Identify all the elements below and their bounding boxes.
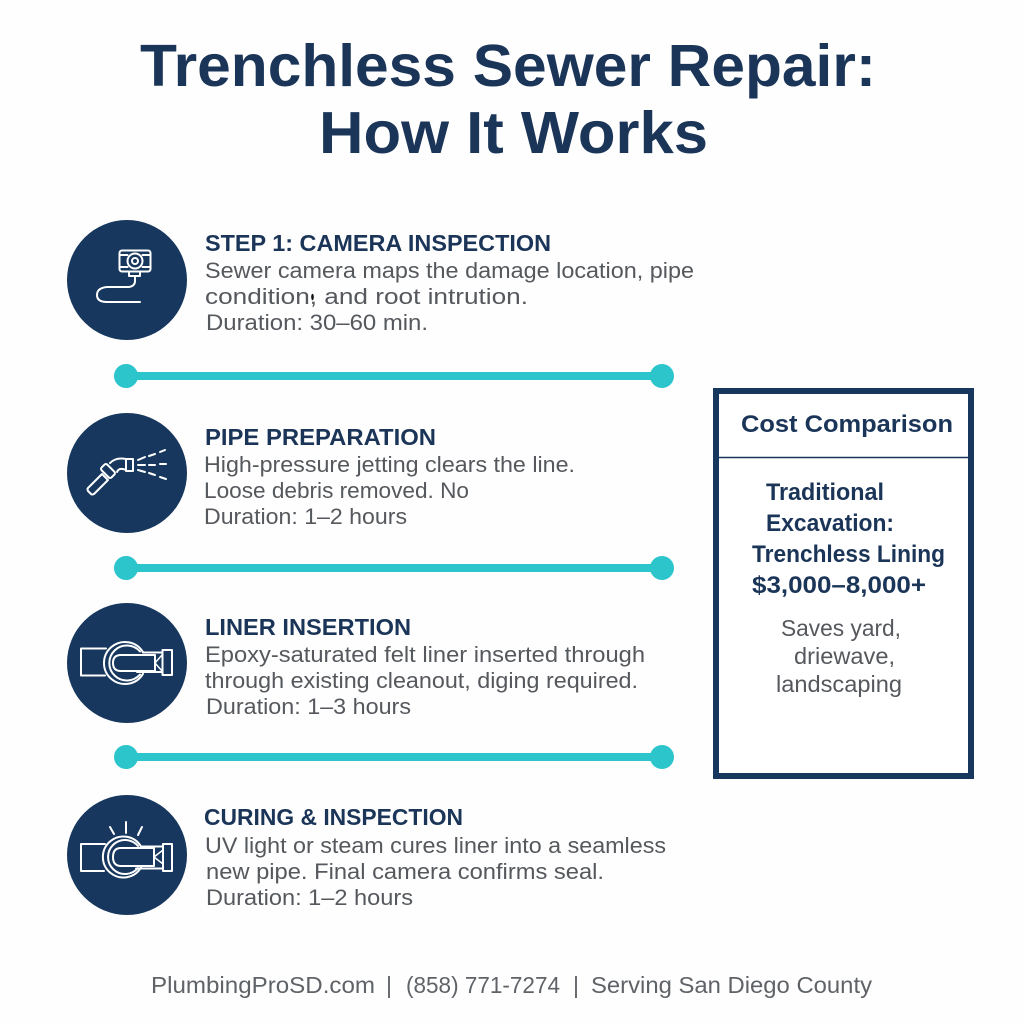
footer contact line: | [386,972,392,998]
step 1 description [205,258,694,335]
step 1 description: condition, and root intrution. [205,284,528,309]
footer contact line: Serving San Diego County [591,972,873,998]
step 2 description: Duration: 1–2 hours [204,504,407,529]
cost figures: Traditional [766,479,884,506]
step 2 description [204,452,575,529]
savings note [776,615,902,697]
title: Trenchless Sewer Repair: [140,33,876,99]
step 2 description: High-pressure jetting clears the line. [204,452,575,477]
cost comparison heading: Cost Comparison [741,411,953,438]
savings note: landscaping [776,671,902,697]
icon: curing pipe with light rays [67,795,187,915]
step 3 description: Duration: 1–3 hours [206,694,411,719]
step 1 description: Sewer camera maps the damage location, pipe [205,258,694,283]
savings note: driewave, [794,643,895,669]
step 4 description: Duration: 1–2 hours [206,885,413,910]
cost figures: $3,000–8,000+ [752,572,926,599]
step 2 heading: PIPE PREPARATION [205,424,436,450]
title [140,33,876,166]
step 2 description: Loose debris removed. No [204,478,469,503]
step 4 description: new pipe. Final camera confirms seal. [206,859,604,884]
savings note: Saves yard, [781,615,901,641]
step 3 description [205,642,645,719]
cost figures: Trenchless Lining [752,541,945,568]
step 4 description: UV light or steam cures liner into a seamless [205,833,666,858]
step 4 description [205,833,666,910]
connector 1 [114,364,674,388]
footer contact line: (858) 771-7274 [406,972,560,998]
icon: pipe liner [67,603,187,723]
panel: step 3 liner insertion [67,603,645,723]
step 3 description: through existing cleanout, diging required. [205,668,638,693]
cost figures: Excavation: [766,510,894,537]
title: How It Works [319,100,708,166]
panel: step 2 pipe preparation [67,413,575,533]
step 1 heading: STEP 1: CAMERA INSPECTION [205,230,551,256]
panel: cost comparison [716,391,971,776]
connector 3 [114,745,674,769]
panel: step 4 curing and inspection [67,795,666,915]
connector 2 [114,556,674,580]
step 3 description: Epoxy-saturated felt liner inserted through [205,642,645,667]
footer contact line: PlumbingProSD.com [151,972,375,998]
cost figures [752,479,945,599]
panel: step 1 camera inspection [67,220,694,340]
step 3 heading: LINER INSERTION [205,614,411,640]
icon: sewer camera [67,220,187,340]
footer contact line [151,972,873,998]
icon: jetting nozzle [67,413,187,533]
step 4 heading: CURING & INSPECTION [204,804,463,830]
step 1 description: Duration: 30–60 min. [206,310,428,335]
footer contact line: | [573,972,579,998]
